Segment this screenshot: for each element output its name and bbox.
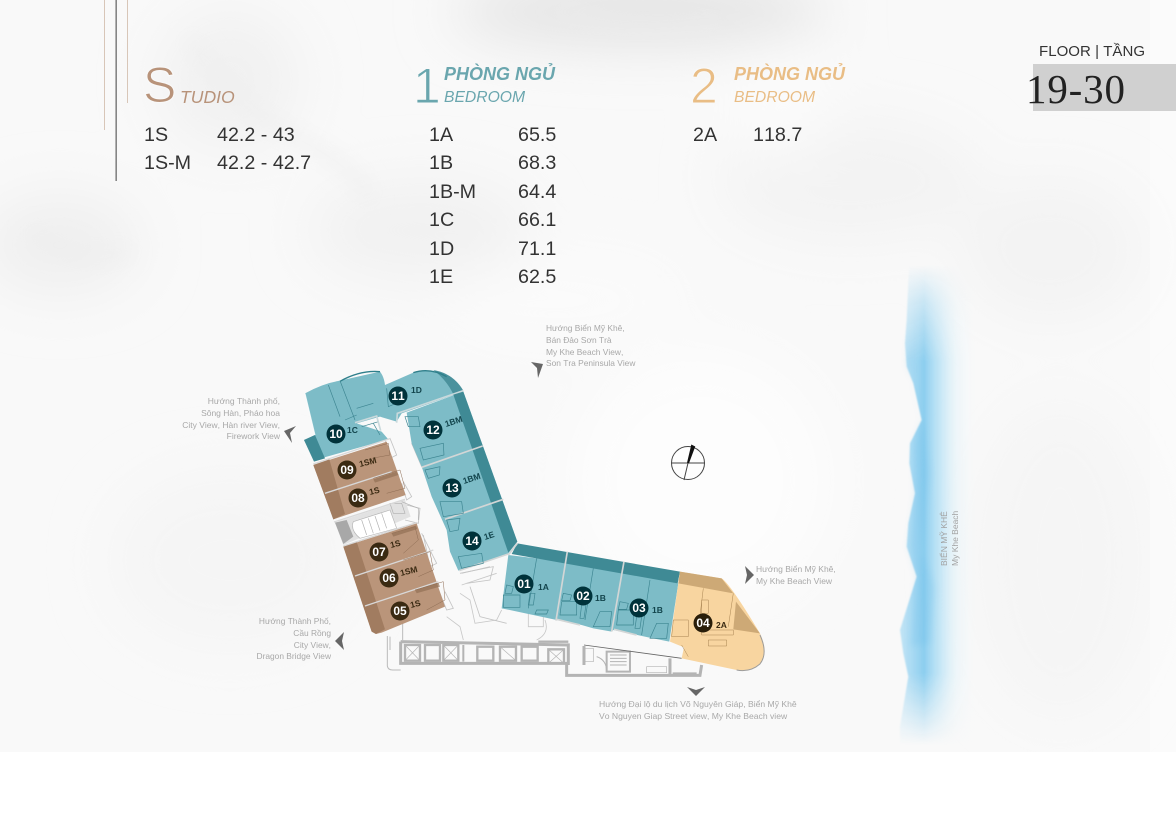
- table: 2 bedroom areas: 118.7: [753, 124, 802, 146]
- unit 08: [348, 485, 381, 508]
- building core: [387, 567, 702, 675]
- view label: son tra: Son Tra Peninsula View: [546, 358, 636, 368]
- upper wing corridor details: [385, 438, 507, 623]
- view label: son tra: Bán Đảo Sơn Trà: [546, 335, 612, 345]
- unit 07: 07: [372, 545, 386, 559]
- unit 06: 1SM: [399, 564, 418, 578]
- table: 1 bedroom areas: 62.5: [518, 266, 556, 288]
- unit 14: 1E: [483, 529, 496, 542]
- view label: city: Sông Hàn, Pháo hoa: [201, 408, 280, 418]
- table: studio areas: 42.2 - 42.7: [217, 152, 311, 174]
- unit 05: [390, 598, 422, 620]
- unit 11: 11: [391, 389, 405, 403]
- heading: studio: [143, 57, 235, 113]
- unit 02: [574, 586, 606, 606]
- unit 06: [380, 564, 418, 588]
- unit 10: 10: [329, 427, 343, 441]
- unit 07: 1S: [389, 538, 402, 550]
- orange unit 04 body: [670, 572, 765, 671]
- heading: 1 bedroom: PHÒNG NGỦ: [444, 63, 556, 84]
- view label: son tra: Hướng Biển Mỹ Khê,: [546, 323, 625, 333]
- unit 05: 1S: [409, 598, 422, 610]
- heading: studio: S: [143, 57, 176, 113]
- sea label: BIỂN MỸ KHÊ: [938, 511, 949, 566]
- view label: dragon bridge: Cầu Rồng: [293, 628, 331, 638]
- unit 02: 02: [576, 589, 590, 603]
- table: 1 bedroom areas: 1B-M: [429, 181, 476, 203]
- heading: 2 bedroom: PHÒNG NGỦ: [734, 63, 846, 84]
- view label: city: Hướng Thành phố,: [208, 396, 280, 406]
- unit 12: 1BM: [444, 414, 464, 429]
- unit 12: 12: [426, 423, 440, 437]
- unit 13: 1BM: [462, 471, 482, 486]
- table: 1 bedroom areas: 68.3: [518, 152, 556, 174]
- table: studio areas: 42.2 - 43: [217, 124, 295, 146]
- floor label: 19-30: [1026, 66, 1125, 112]
- unit 01: 01: [517, 577, 531, 591]
- unit 01: [514, 574, 549, 594]
- unit 03: [630, 598, 663, 618]
- compass: [672, 446, 704, 480]
- arrow: city: [284, 426, 296, 443]
- view label: dragon bridge: City View,: [294, 640, 331, 650]
- unit 13: 13: [445, 481, 459, 495]
- view label: street: [599, 699, 797, 721]
- table: 1 bedroom areas: 65.5: [518, 124, 556, 146]
- view label: dragon bridge: Dragon Bridge View: [257, 651, 332, 661]
- unit 04: 04: [696, 616, 710, 630]
- unit 09: [338, 455, 377, 480]
- table: 2 bedroom areas: 2A: [693, 124, 718, 146]
- arrow: dragon bridge: [335, 632, 344, 650]
- brown studio wing body: [313, 438, 445, 634]
- heading: 1 bedroom: BEDROOM: [444, 89, 526, 106]
- table: studio areas: 1S: [144, 124, 168, 146]
- view label: my khe east: My Khe Beach View: [756, 576, 833, 586]
- unit 03: 03: [632, 601, 646, 615]
- unit 11: [388, 385, 422, 406]
- view label: city: [182, 396, 281, 441]
- view label: city: Firework View: [227, 431, 281, 441]
- heading: 1 bedroom: [413, 58, 556, 114]
- view label: street: Vo Nguyen Giap Street view, My Khe Beach view: [599, 711, 788, 721]
- view label: street: Hướng Đại lộ du lịch Võ Nguyên Giáp, Biển Mỹ Khê: [599, 699, 797, 709]
- table: 1 bedroom areas: 1A: [429, 124, 454, 146]
- sea watercolor: [900, 271, 960, 740]
- view label: city: City View, Hàn river View,: [182, 420, 280, 430]
- view label: my khe east: [756, 564, 836, 586]
- table: 1 bedroom areas: 71.1: [518, 238, 556, 260]
- decorative vertical lines: [104, 0, 128, 181]
- upper left teal units 10 and 11 body: [304, 370, 463, 462]
- unit 03: 1B: [652, 605, 663, 615]
- floor label: FLOOR | TẦNG: [1039, 43, 1145, 60]
- table: 1 bedroom areas: 1D: [429, 238, 454, 260]
- unit 01: 1A: [538, 582, 549, 592]
- unit 08: 1S: [368, 485, 381, 497]
- unit 09: 1SM: [358, 455, 377, 469]
- table: 1 bedroom areas: 1C: [429, 209, 454, 231]
- table: studio areas: [144, 124, 311, 174]
- unit 02: 1B: [595, 593, 606, 603]
- heading: 2 bedroom: 2: [690, 58, 718, 114]
- heading: 1 bedroom: 1: [413, 58, 441, 114]
- heading: 2 bedroom: BEDROOM: [734, 89, 816, 106]
- view label: my khe east: Hướng Biển Mỹ Khê,: [756, 564, 836, 574]
- table: 1 bedroom areas: 1E: [429, 266, 453, 288]
- table: studio areas: 1S-M: [144, 152, 191, 174]
- table: 1 bedroom areas: [429, 124, 556, 288]
- arrow: my khe east: [745, 566, 754, 584]
- sea label: My Khe Beach: [950, 510, 960, 566]
- unit 11: 1D: [411, 385, 422, 395]
- unit 14: [462, 529, 496, 550]
- unit 08: 08: [351, 491, 365, 505]
- arrow: son tra: [531, 362, 543, 378]
- heading: studio: TUDIO: [180, 87, 235, 107]
- unit 13: [442, 471, 482, 498]
- table: 1 bedroom areas: 66.1: [518, 209, 556, 231]
- right teal wing body: [405, 392, 517, 571]
- view label: dragon bridge: Hướng Thành Phố,: [259, 616, 331, 626]
- unit 10: [326, 424, 358, 444]
- unit 04: 2A: [716, 620, 727, 630]
- unit 12: [424, 414, 464, 440]
- unit 05: 05: [393, 604, 407, 618]
- arrow: street view: [687, 687, 705, 696]
- unit 10: 1C: [347, 425, 358, 435]
- heading: 2 bedroom: [690, 58, 846, 114]
- unit 04: [694, 614, 727, 632]
- view label: dragon bridge: [257, 616, 332, 661]
- unit 09: 09: [340, 463, 354, 477]
- lower teal units body: [502, 543, 680, 642]
- floor label: [1026, 43, 1176, 112]
- view label: son tra: [546, 323, 636, 368]
- unit 14: 14: [465, 534, 479, 548]
- unit 07: [370, 538, 402, 562]
- sea label: [938, 510, 960, 566]
- table: 2 bedroom areas: [693, 124, 802, 146]
- unit 06: 06: [382, 571, 396, 585]
- table: 1 bedroom areas: 64.4: [518, 181, 556, 203]
- view label: son tra: My Khe Beach View,: [546, 347, 623, 357]
- table: 1 bedroom areas: 1B: [429, 152, 453, 174]
